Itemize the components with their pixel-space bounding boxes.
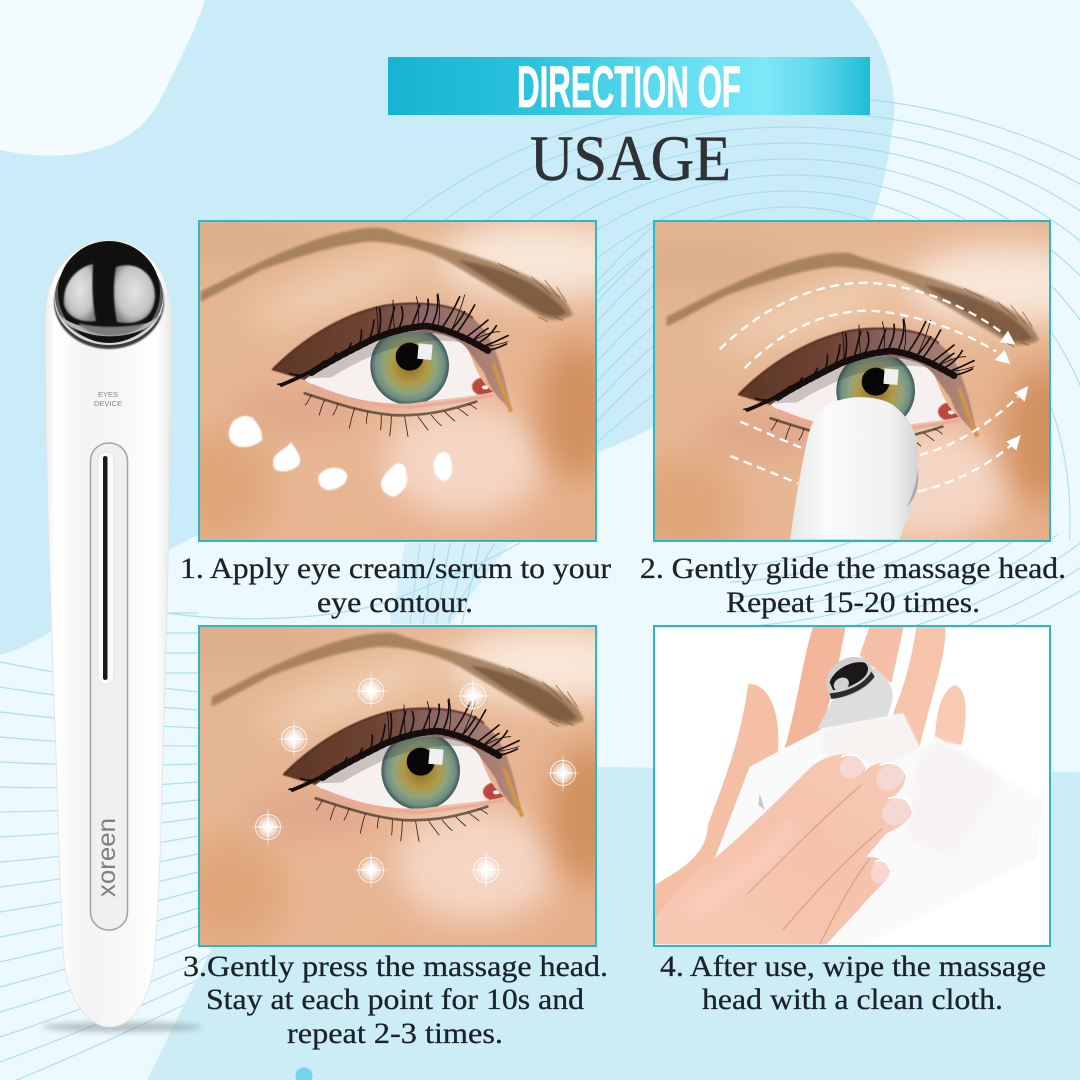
caption 2 <box>640 552 1066 619</box>
panel 3: press massage head <box>198 625 597 947</box>
slot panel <box>90 443 128 930</box>
massage direction arrows <box>720 283 1028 492</box>
metal head <box>54 241 164 349</box>
caption 3 <box>183 950 608 1050</box>
title banner: DIRECTION OF <box>517 55 741 120</box>
label: eyes device <box>94 390 122 408</box>
caption 3: 3.Gently press the massage head. <box>183 950 608 983</box>
caption 2: Repeat 15-20 times. <box>726 586 980 619</box>
panel 2: glide massage head <box>611 205 1080 605</box>
lower background shape <box>147 766 1080 1080</box>
device in hand <box>818 657 893 728</box>
panel 1: apply cream <box>198 220 597 542</box>
device tip <box>790 397 918 539</box>
slot <box>98 452 114 684</box>
heading: usage: USAGE <box>530 123 731 195</box>
caption 1: 1. Apply eye cream/serum to your <box>180 552 611 585</box>
caption 3: repeat 2-3 times. <box>287 1017 503 1050</box>
brand name: xoreen <box>93 818 121 897</box>
caption 2: 2. Gently glide the massage head. <box>640 552 1066 585</box>
caption 4: head with a clean cloth. <box>702 983 1003 1016</box>
sparkles <box>250 671 581 890</box>
caption 3: Stay at each point for 10s and <box>206 983 584 1016</box>
panel 4: wipe with cloth <box>653 625 1051 947</box>
nails <box>840 754 913 884</box>
cream dots <box>229 416 452 497</box>
caption 1 <box>180 552 611 619</box>
title banner <box>388 55 870 120</box>
front hand <box>655 754 912 944</box>
back hand <box>655 627 966 943</box>
caption 4: 4. After use, wipe the massage <box>660 950 1046 983</box>
caption 4 <box>660 950 1046 1016</box>
cloth <box>714 712 1000 858</box>
caption 1: eye contour. <box>317 586 473 619</box>
label: eyes device: EYES <box>98 390 118 399</box>
decorative dot <box>296 1068 312 1080</box>
device: eye massager <box>42 240 202 1032</box>
label: eyes device: DEVICE <box>94 399 122 408</box>
